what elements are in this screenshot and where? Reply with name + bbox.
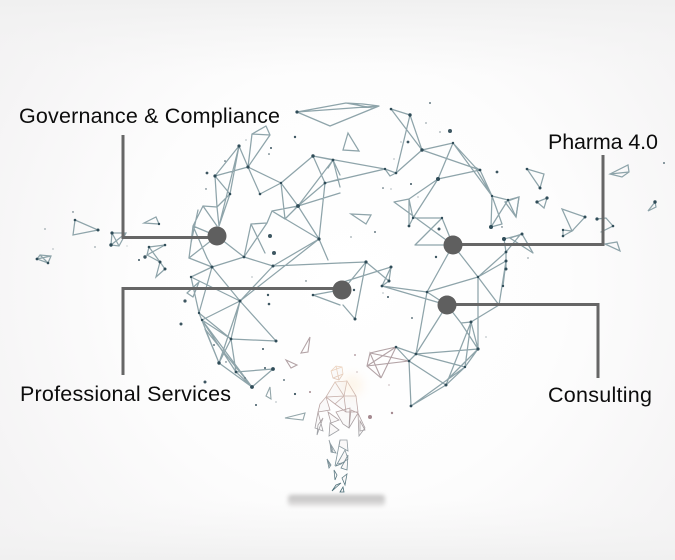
figure: legs [327, 423, 348, 492]
figure shadow [288, 495, 385, 506]
connector: Governance & Compliance [123, 135, 226, 246]
globe network mesh [37, 103, 656, 406]
figure: arms [315, 412, 365, 436]
network node dots [36, 108, 657, 407]
label: Consulting: Consulting [548, 383, 652, 407]
mesh: lower right of globe [340, 235, 520, 406]
connector: Consulting [438, 296, 598, 378]
label: Pharma 4.0: Pharma 4.0 [548, 130, 658, 154]
mesh: lower left of globe [187, 239, 340, 387]
label: Professional Services: Professional Services [20, 382, 231, 406]
pink specks [309, 354, 393, 419]
mesh: top and right of globe [297, 103, 519, 245]
connector: Professional Services [123, 280, 352, 375]
floating triangles [37, 133, 656, 277]
mesh: upper left of globe [189, 126, 385, 266]
loose specks [44, 102, 665, 406]
label: Governance & Compliance: Governance & Compliance [19, 104, 280, 128]
human figure [315, 366, 365, 492]
figure: torso [318, 381, 358, 428]
figure: head [331, 366, 343, 380]
connector: Pharma 4.0 [444, 155, 603, 254]
glow behind figure shoulder [341, 374, 363, 396]
pink floating triangles near figure [266, 337, 409, 420]
